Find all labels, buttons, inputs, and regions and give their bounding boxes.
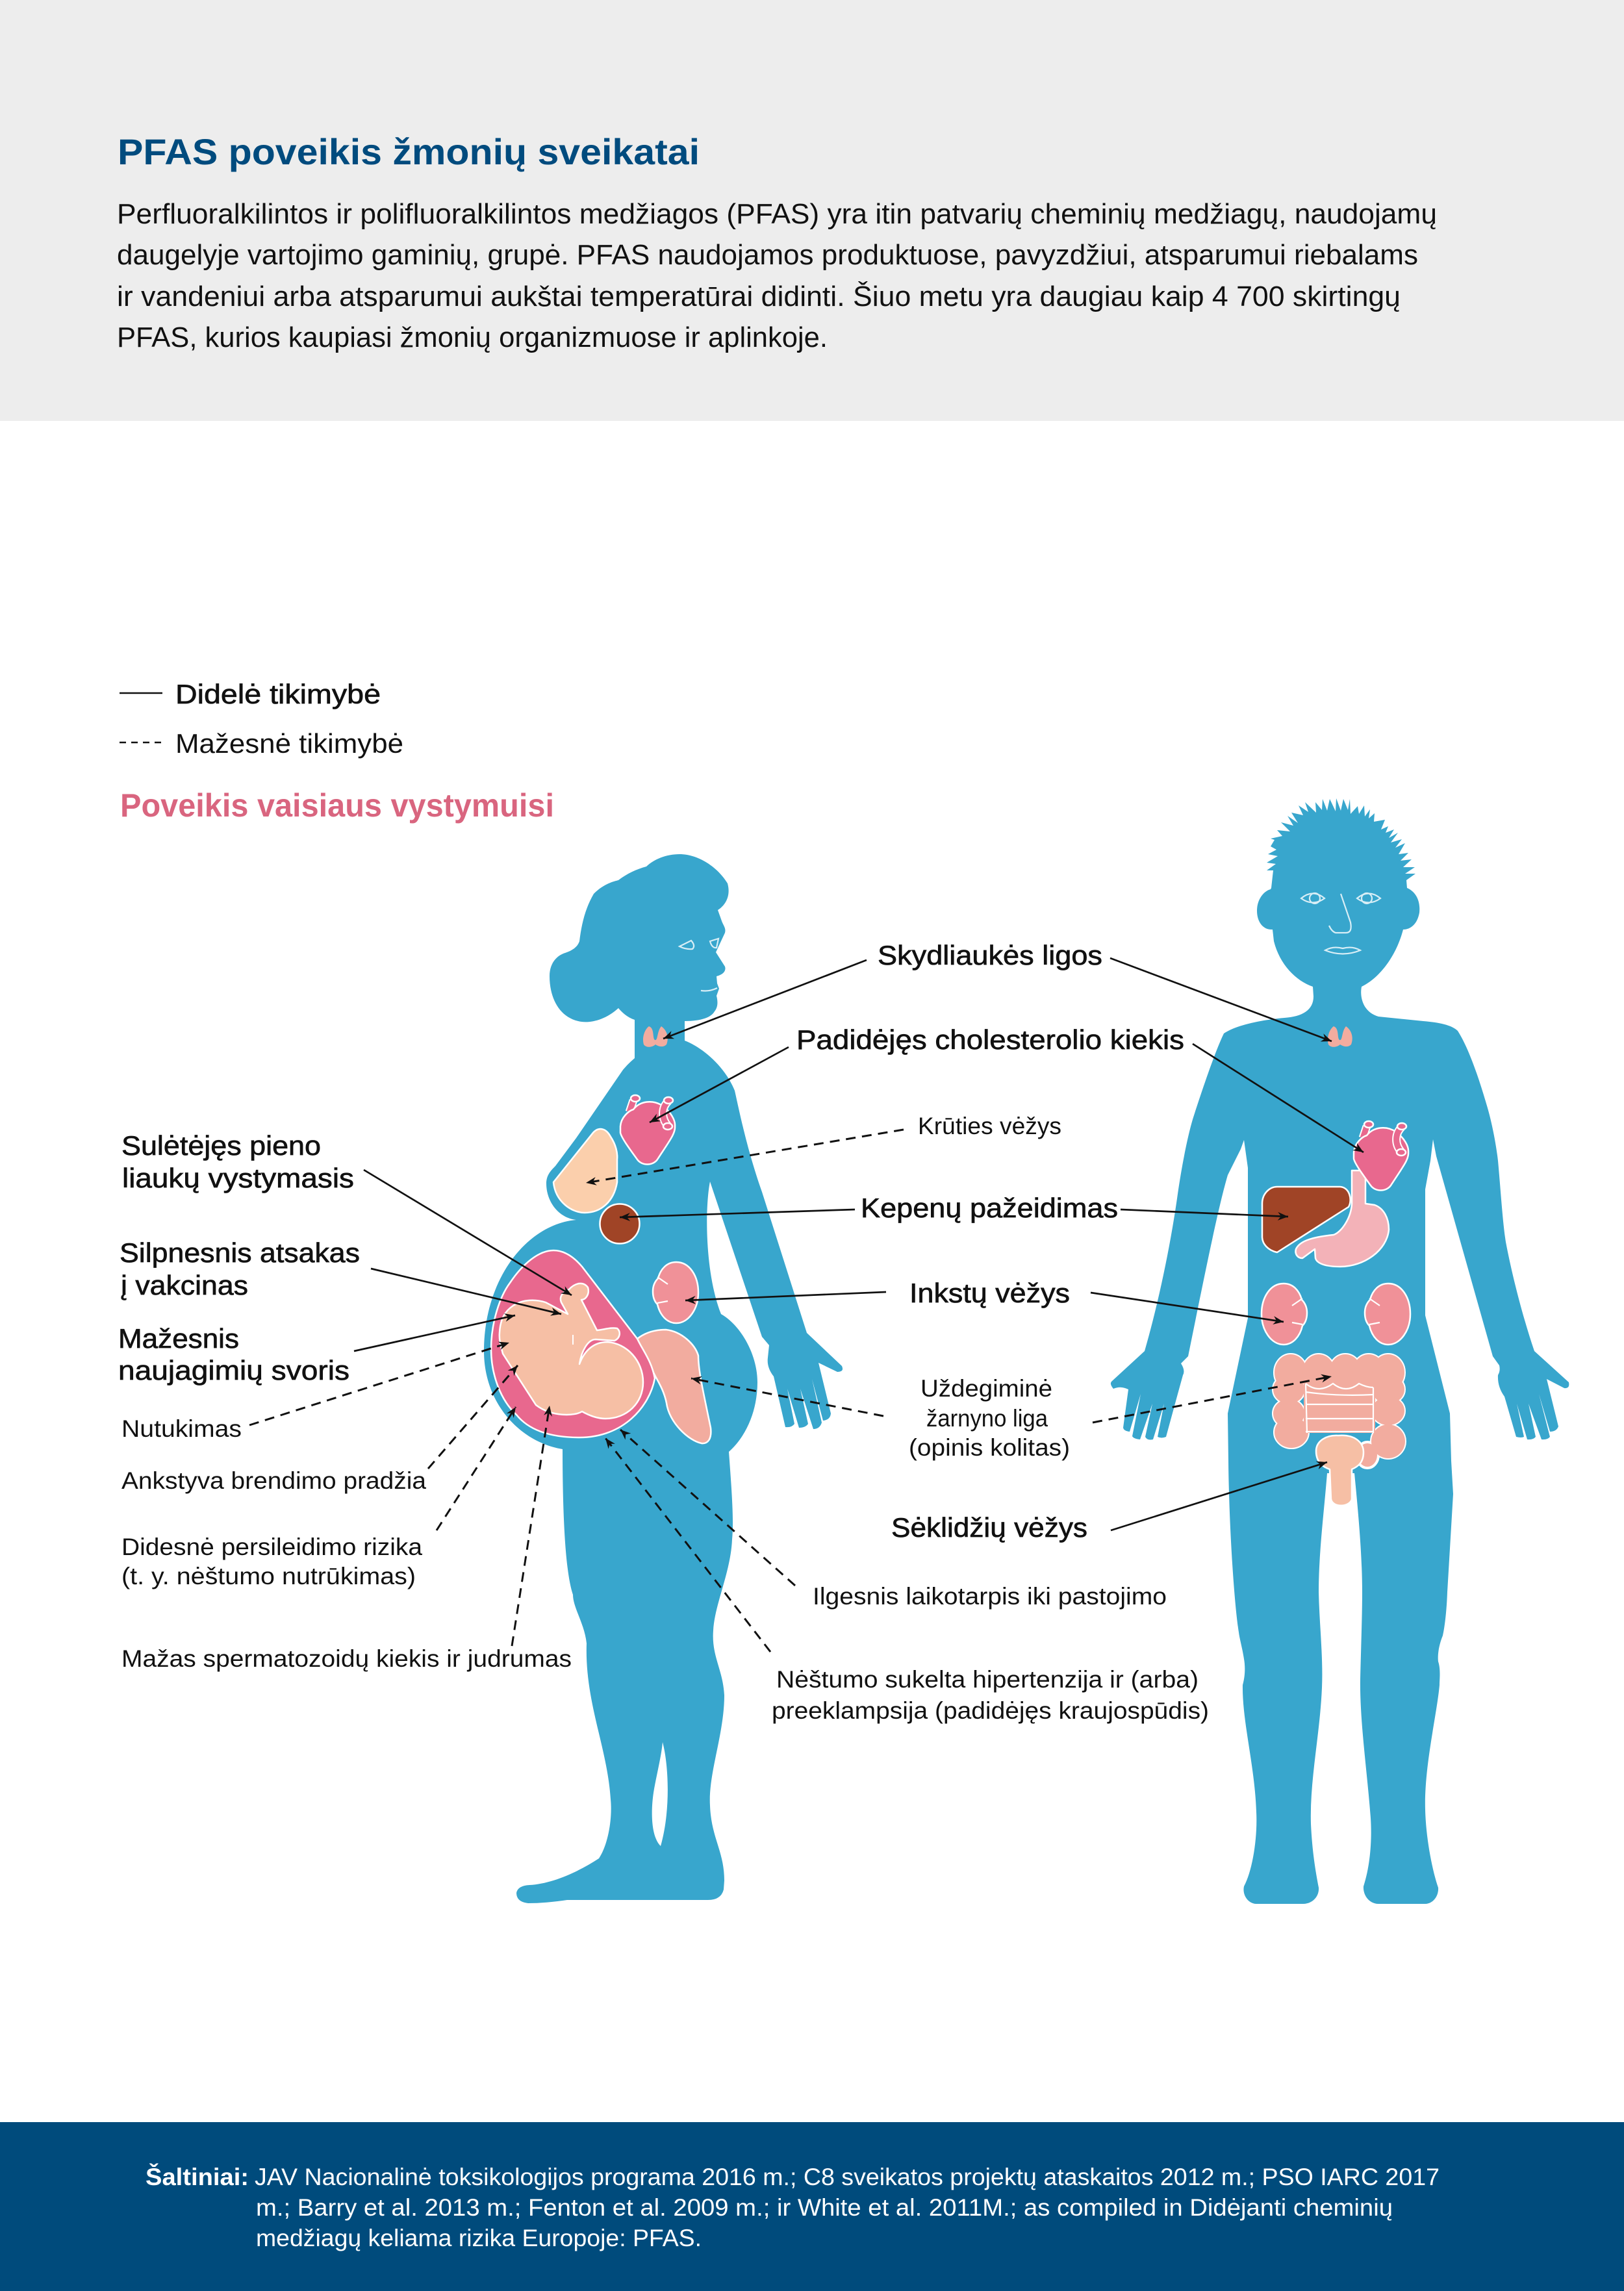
man heart — [1354, 1121, 1408, 1190]
label: liver damage: Kepenų pažeidimas — [861, 1193, 1118, 1223]
label: ulcerative colitis: Uždegiminė — [920, 1375, 1052, 1402]
intro text block — [117, 198, 1437, 353]
label: miscarriage risk — [121, 1534, 422, 1589]
labels: lower likelihood effects — [121, 1113, 1209, 1724]
fetus — [500, 1284, 643, 1419]
fetus detail — [572, 1335, 574, 1345]
footer sources: JAV Nacionalinė toksikologijos programa 2016 m.; C8 sveikatos projektų ataskaitos 2012 m.; PSO IARC 2017 — [255, 2164, 1440, 2190]
legend: dashed line, lower likelihood: Mažesnė tikimybė — [175, 728, 403, 759]
label: thyroid disease: Skydliaukės ligos — [878, 940, 1102, 970]
man liver — [1262, 1187, 1351, 1252]
label: high cholesterol: Padidėjęs cholesterolio kiekis — [796, 1024, 1184, 1055]
panel: header background — [0, 0, 1624, 421]
label: ulcerative colitis: (opinis kolitas) — [909, 1434, 1070, 1461]
woman heart — [620, 1095, 675, 1164]
woman face — [679, 939, 718, 991]
label: lower birth weight — [118, 1323, 349, 1386]
intro text block: ir vandeniui arba atsparumui aukštai temperatūrai didinti. Šiuo metu yra daugiau kaip 4 700 skirtingų — [117, 280, 1401, 312]
footer sources: m.; Barry et al. 2013 m.; Fenton et al. 2009 m.; ir White et al. 2011M.; as compiled in Didėjanti cheminių — [256, 2194, 1393, 2221]
footer sources: Šaltiniai: — [146, 2163, 249, 2190]
gap between legs — [652, 1742, 668, 1846]
arrows: dashed — [249, 1130, 1332, 1652]
label: ulcerative colitis: žarnyno liga — [926, 1405, 1048, 1432]
panel: footer background — [0, 2122, 1624, 2291]
heading: fetal development: Poveikis vaisiaus vystymuisi — [120, 787, 554, 824]
footer sources: medžiagų keliama rizika Europoje: PFAS. — [256, 2225, 702, 2251]
label: delayed mammary development — [121, 1130, 354, 1193]
man face — [1301, 893, 1380, 954]
man silhouette with hair — [1111, 798, 1569, 1904]
man kidney, left of figure — [1262, 1284, 1307, 1345]
label: miscarriage risk: Didesnė persileidimo rizika — [121, 1534, 422, 1560]
title: PFAS poveikis žmonių sveikatai — [118, 131, 700, 172]
woman thyroid — [643, 1026, 668, 1047]
label: weaker vaccine response: Silpnesnis atsakas — [120, 1237, 360, 1268]
woman liver — [600, 1204, 639, 1243]
intro text block: daugelyje vartojimo gaminių, grupė. PFAS naudojamos produktuose, pavyzdžiui, atsparumui riebalams — [117, 239, 1418, 271]
label: time to pregnancy: Ilgesnis laikotarpis iki pastojimo — [813, 1583, 1167, 1610]
label: delayed mammary development: liaukų vystymasis — [122, 1163, 354, 1193]
labels: central high likelihood — [796, 940, 1184, 1543]
label: kidney cancer: Inkstų vėžys — [909, 1278, 1070, 1308]
label: pregnancy hypertension — [772, 1666, 1209, 1724]
figure: man — [1111, 798, 1569, 1904]
label: delayed mammary development: Sulėtėjęs pieno — [121, 1130, 321, 1161]
man stomach — [1295, 1171, 1389, 1267]
label: sperm count: Mažas spermatozoidų kiekis ir judrumas — [121, 1645, 572, 1672]
man kidney, right of figure — [1365, 1284, 1410, 1345]
man colon — [1273, 1354, 1405, 1468]
intro text block: Perfluoralkilintos ir polifluoralkilintos medžiagos (PFAS) yra itin patvarių cheminių medžiagų, naudojamų — [117, 198, 1437, 230]
woman intestine — [637, 1330, 711, 1443]
footer sources — [146, 2163, 1440, 2251]
man thyroid — [1328, 1026, 1352, 1047]
label: miscarriage risk: (t. y. nėštumo nutrūkimas) — [121, 1563, 416, 1589]
legend — [120, 679, 403, 759]
label: lower birth weight: naujagimių svoris — [118, 1355, 349, 1386]
label: early puberty: Ankstyva brendimo pradžia — [121, 1467, 426, 1494]
label: weaker vaccine response — [120, 1237, 360, 1300]
label: lower birth weight: Mažesnis — [118, 1323, 239, 1354]
man testis — [1316, 1436, 1364, 1506]
label: ulcerative colitis — [909, 1375, 1070, 1461]
label: weaker vaccine response: į vakcinas — [121, 1270, 248, 1300]
arrows: solid — [354, 958, 1364, 1530]
woman silhouette — [484, 854, 843, 1903]
label: obesity: Nutukimas — [121, 1415, 242, 1442]
woman breast — [553, 1129, 617, 1213]
labels: high likelihood effects on fetus and mother — [118, 1130, 360, 1386]
label: pregnancy hypertension: Nėštumo sukelta hipertenzija ir (arba) — [776, 1666, 1199, 1693]
uterus — [491, 1250, 655, 1437]
label: breast cancer: Krūties vėžys — [918, 1113, 1061, 1139]
intro text block: PFAS, kurios kaupiasi žmonių organizmuose ir aplinkoje. — [117, 322, 828, 353]
legend: solid line, high likelihood: Didelė tikimybė — [175, 679, 381, 709]
label: testicular cancer: Sėklidžių vėžys — [891, 1512, 1087, 1543]
woman kidney — [653, 1262, 698, 1323]
figure: pregnant woman — [484, 854, 843, 1903]
label: pregnancy hypertension: preeklampsija (padidėjęs kraujospūdis) — [772, 1697, 1209, 1724]
